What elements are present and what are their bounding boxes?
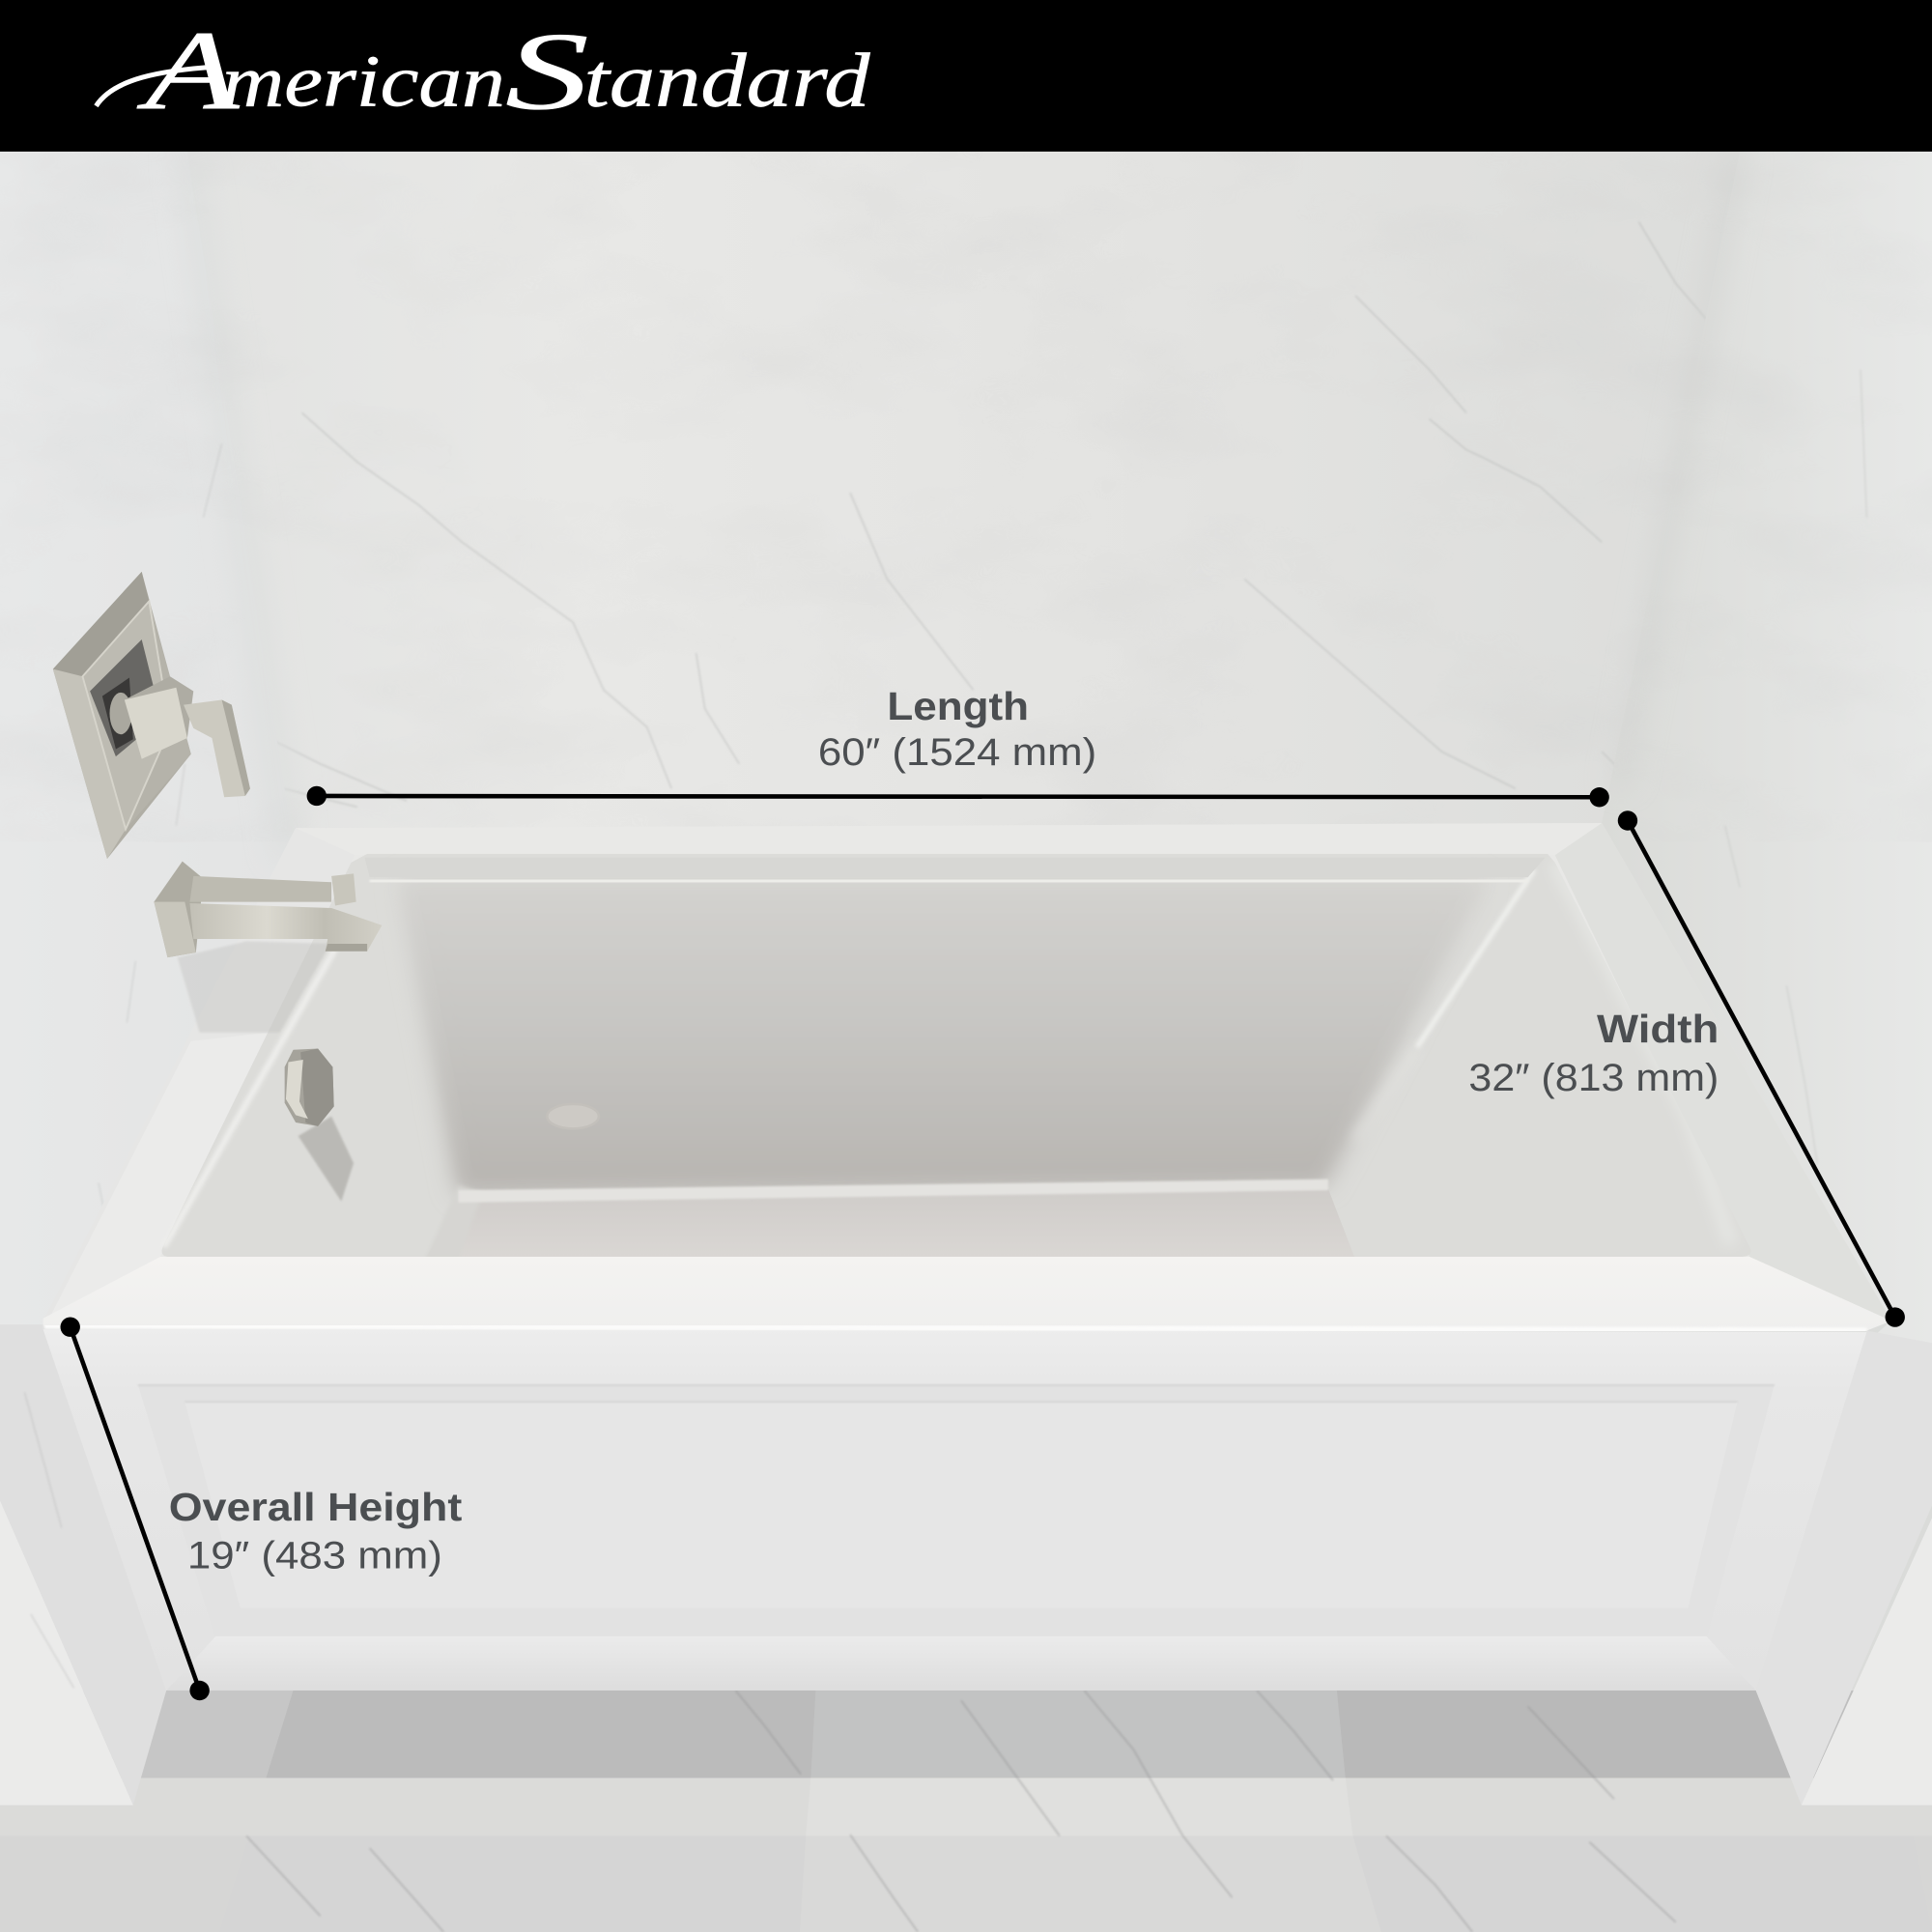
label: length xyxy=(818,684,1096,774)
dimension: width line xyxy=(1618,810,1905,1327)
shadow under spout xyxy=(178,941,330,1033)
basin interior xyxy=(421,966,1428,1190)
panel: back wall xyxy=(0,152,1932,1691)
label: overall height xyxy=(169,1485,463,1577)
bottom step ledge xyxy=(469,1191,1347,1240)
panel: left low wall block xyxy=(0,1324,166,1805)
floor marble veins xyxy=(246,1690,1676,1932)
logo: American Standard: S xyxy=(505,10,589,132)
shadow of overflow cover xyxy=(298,1117,354,1202)
label: length: 60″ (1524 mm) xyxy=(818,731,1096,774)
label: overall height: 19″ (483 mm) xyxy=(187,1535,442,1577)
icon: tub spout xyxy=(154,862,382,957)
dimension: overall height line xyxy=(60,1318,210,1700)
logo: American Standard xyxy=(96,8,870,133)
dimension: length line xyxy=(307,786,1609,807)
label: length: Length xyxy=(887,684,1029,728)
panel: right low wall block xyxy=(1756,1331,1932,1805)
label: overall height: Overall Height xyxy=(169,1485,463,1529)
panel: floor tiles xyxy=(0,1690,1932,1932)
left rim highlight xyxy=(164,949,335,1247)
marble veins on back wall xyxy=(246,222,1713,807)
icon: overflow drain cover xyxy=(285,1048,334,1126)
label: width: Width xyxy=(1597,1007,1719,1051)
panel: bathtub xyxy=(43,823,1891,1690)
panel: right wall xyxy=(1602,152,1932,1355)
top rolled edge highlights xyxy=(1524,867,1535,877)
drain xyxy=(549,1105,597,1127)
header bar xyxy=(0,0,1932,152)
bathtub apron panel xyxy=(43,1329,1866,1690)
front deck xyxy=(43,1257,1891,1331)
logo: American Standard: tandard xyxy=(584,40,870,124)
logo: American Standard: A xyxy=(136,8,241,133)
marble cloud texture xyxy=(0,152,1932,841)
icon: wall valve trim plate and handle xyxy=(53,572,250,859)
tub rim and deck xyxy=(43,823,1891,1321)
label: width xyxy=(1468,1007,1719,1099)
logo: American Standard: merican xyxy=(222,41,505,123)
bathtub basin xyxy=(148,850,1762,1263)
label: width: 32″ (813 mm) xyxy=(1468,1057,1719,1099)
panel: left wall xyxy=(0,152,305,1324)
